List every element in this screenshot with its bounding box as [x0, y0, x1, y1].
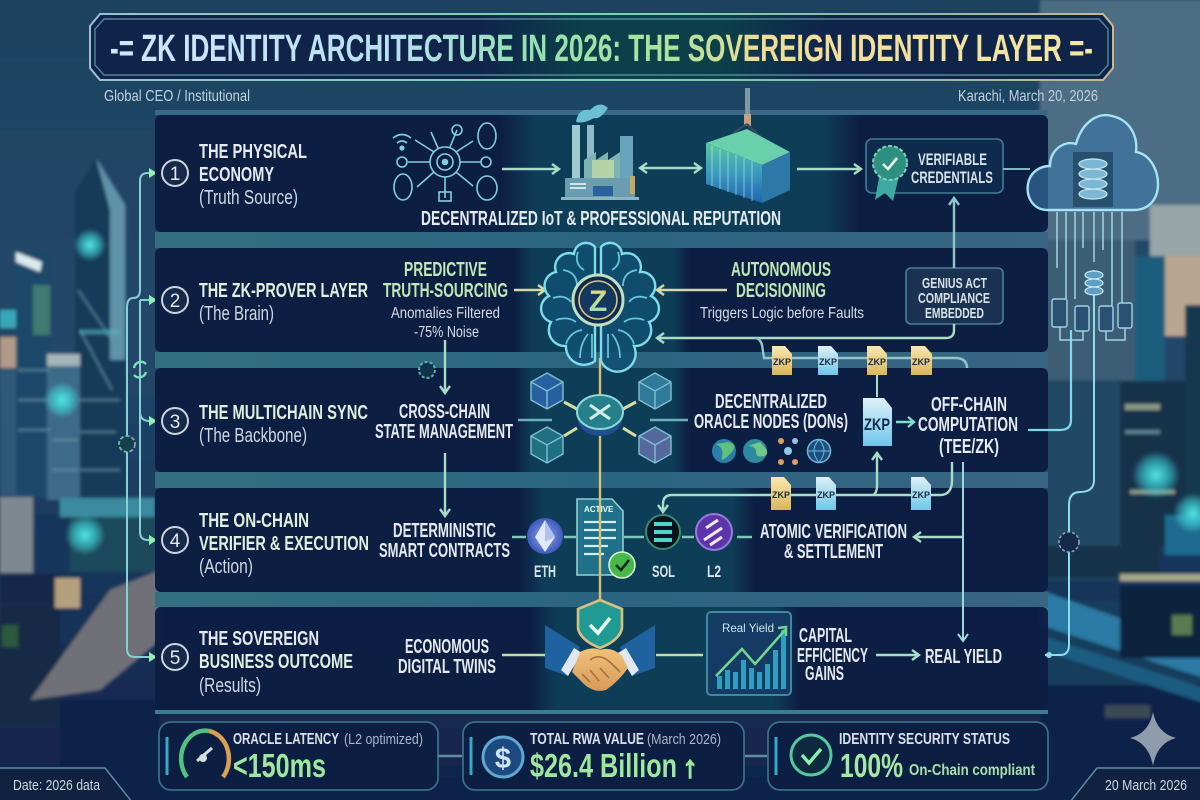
smart contracts text: SMART CONTRACTS	[379, 540, 510, 562]
icon: cloud with databases	[1028, 115, 1158, 340]
KPI: oracle latency	[159, 722, 438, 790]
icon: sparkle star	[1130, 712, 1176, 766]
arrow to off-chain	[896, 417, 914, 427]
icon: L2: L2	[707, 562, 721, 581]
heading: ECONOMY	[199, 164, 274, 186]
step number 4: 4	[170, 531, 181, 552]
vertical brain connector	[599, 358, 601, 600]
corner tab: date: Date: 2026 data	[13, 777, 101, 794]
icon: ZKP document	[863, 398, 892, 446]
capital efficiency text: EFFICIENCY	[797, 645, 868, 667]
heading: THE MULTICHAIN SYNC	[199, 402, 368, 424]
step number 1	[162, 160, 188, 186]
small gear icon	[419, 362, 435, 378]
arrow to brain	[514, 285, 545, 295]
predictive text	[383, 259, 508, 341]
connector lines	[502, 654, 703, 656]
verifiable credentials box: VERIFIABLE	[918, 150, 987, 169]
icon: chain cubes	[531, 373, 671, 463]
KPI: identity security: IDENTITY SECURITY STATUS	[839, 731, 1010, 748]
KPI: oracle latency: <150ms	[233, 747, 326, 784]
predictive text: Anomalies Filtered	[391, 305, 500, 322]
heading: VERIFIER & EXECUTION	[199, 533, 369, 555]
arrow: to off-chain	[755, 338, 972, 386]
KPI: identity security: On-Chain compliant	[909, 762, 1036, 779]
compliance box: GENIUS ACT	[922, 275, 987, 292]
digital twins text: ECONOMOUS	[405, 636, 489, 658]
off-chain text: (TEE/ZK)	[939, 436, 999, 458]
label: IoT: DECENTRALIZED IoT & PROFESSIONAL REPUTATION	[421, 208, 781, 230]
icon: SOL: SOL	[652, 562, 675, 581]
KPI: identity security	[768, 722, 1048, 790]
capital efficiency text	[797, 625, 868, 685]
icons: globes	[712, 438, 831, 465]
ZKP tokens lower row: ZKP	[912, 490, 930, 500]
heading: (Truth Source)	[199, 187, 298, 209]
icon: check	[609, 552, 635, 578]
icon: ETH: ETH	[534, 562, 556, 581]
cross chain text: CROSS-CHAIN	[399, 401, 490, 423]
digital twins text: DIGITAL TWINS	[398, 656, 496, 678]
title banner	[90, 14, 1113, 80]
icon: brain with Z coin: Z	[589, 285, 607, 318]
corner tab: date	[0, 768, 132, 800]
arrow to atomic	[914, 532, 964, 542]
oracle text	[694, 391, 848, 433]
arrow: compliance up to credentials	[949, 198, 959, 268]
ZKP tokens upper row: ZKP	[868, 357, 886, 367]
KPI: oracle latency: (L2 optimized)	[344, 731, 423, 748]
arrow double	[640, 163, 701, 173]
icon: L2	[696, 514, 732, 581]
oracle text: ORACLE NODES (DONs)	[694, 411, 848, 433]
KPI: total RWA: TOTAL RWA VALUE	[530, 731, 644, 748]
smart contracts text: DETERMINISTIC	[393, 520, 496, 542]
icon: active contract document: ACTIVE	[584, 505, 614, 514]
icon: shipping container	[706, 88, 790, 203]
arrow from decisioning	[657, 285, 727, 295]
predictive text: -75% Noise	[414, 324, 479, 341]
subtitle left: Global CEO / Institutional	[104, 88, 250, 105]
KPI: identity security: 100%	[840, 747, 903, 784]
subtitle right: Karachi, March 20, 2026	[958, 88, 1098, 105]
ZKP tokens upper row: ZKP	[912, 357, 930, 367]
heading: (Action)	[199, 556, 253, 578]
off-chain text: OFF-CHAIN	[931, 394, 1007, 416]
real yield label: REAL YIELD	[925, 646, 1002, 668]
cross chain text	[375, 401, 513, 443]
heading: BUSINESS OUTCOME	[199, 651, 353, 673]
KPI: total RWA	[463, 722, 744, 790]
icon: factory	[561, 104, 639, 200]
step number 1: 1	[170, 164, 180, 185]
ZKP tokens upper row	[772, 346, 932, 375]
step number 3	[162, 408, 188, 434]
icon: dollar coin	[483, 737, 523, 777]
predictive text: TRUTH-SOURCING	[383, 280, 508, 302]
heading: THE PHYSICAL	[199, 141, 307, 163]
chart: real yield	[707, 612, 791, 695]
icon: hub	[577, 395, 623, 436]
atomic text: & SETTLEMENT	[784, 541, 883, 563]
link: credentials to cloud	[1003, 168, 1030, 170]
heading: THE SOVEREIGN	[199, 628, 319, 650]
step number 4	[162, 527, 188, 553]
oracle text: DECENTRALIZED	[715, 391, 827, 413]
autonomous text: Triggers Logic before Faults	[700, 305, 864, 322]
off-chain text: COMPUTATION	[918, 414, 1018, 436]
KPI: oracle latency: ORACLE LATENCY	[233, 731, 339, 748]
autonomous text: DECISIONING	[736, 280, 826, 302]
icon: shield and handshake	[545, 600, 655, 691]
capital efficiency text: CAPITAL	[799, 625, 852, 647]
panel: on-chain verifier	[155, 488, 1048, 592]
step number 2: 2	[170, 291, 180, 312]
step number 5: 5	[170, 648, 180, 669]
icon: active contract document	[577, 499, 635, 578]
heading	[199, 628, 353, 697]
verifiable credentials box: CREDENTIALS	[911, 168, 993, 187]
predictive text: PREDICTIVE	[404, 259, 487, 281]
verifiable credentials box	[866, 139, 1003, 201]
smart contracts text	[379, 520, 510, 562]
step number 2	[162, 287, 188, 313]
icon: SOL	[646, 515, 680, 581]
atomic text: ATOMIC VERIFICATION	[760, 521, 907, 543]
connector	[512, 536, 752, 538]
arrow to real yield	[876, 650, 919, 660]
ZKP tokens lower row: ZKP	[772, 490, 790, 500]
ZKP tokens upper row: ZKP	[773, 357, 791, 367]
ZKP tokens lower row: ZKP	[817, 490, 835, 500]
autonomous text	[700, 259, 864, 322]
panel: physical economy	[155, 88, 1048, 232]
link between KPI cards	[438, 755, 768, 757]
panel: ZK prover layer	[155, 248, 1048, 352]
atomic text	[760, 521, 907, 563]
heading: (The Brain)	[199, 303, 274, 325]
icon: badge	[873, 146, 907, 201]
heading: (Results)	[199, 675, 261, 697]
left connector lines	[119, 168, 157, 662]
heading: THE ZK-PROVER LAYER	[199, 280, 368, 302]
heading	[199, 402, 368, 447]
digital twins text	[398, 636, 496, 678]
connector: up to big ZKP	[872, 453, 882, 495]
step number 3: 3	[170, 412, 180, 433]
KPI: total RWA: (March 2026)	[647, 731, 721, 748]
capital efficiency text: GAINS	[805, 663, 844, 685]
connector: small ZKP to big ZKP	[876, 368, 878, 397]
icon: ZKP document: ZKP	[864, 415, 890, 434]
corner tab: release date	[1070, 768, 1200, 800]
bands between panels	[155, 110, 1048, 714]
ZKP tokens upper row: ZKP	[819, 357, 837, 367]
panel: multichain sync	[155, 368, 1048, 472]
arrow	[502, 164, 559, 174]
compliance box: EMBEDDED	[925, 305, 984, 322]
panel: sovereign business outcome	[155, 607, 1048, 710]
right connector lines	[1028, 270, 1094, 658]
KPI: total RWA: $26.4 Billion	[530, 747, 677, 784]
icon: ETH	[527, 518, 563, 581]
chart: real yield: Real Yield	[722, 621, 774, 635]
icon: IoT network	[393, 123, 497, 201]
icon: check circle	[791, 735, 831, 775]
compliance box: COMPLIANCE	[918, 290, 990, 307]
heading: (The Backbone)	[199, 425, 307, 447]
arrow: state management down	[440, 340, 450, 516]
heading: THE ON-CHAIN	[199, 510, 309, 532]
icon: gauge	[181, 731, 229, 777]
icon: dollar coin: $	[495, 743, 511, 775]
heading	[199, 141, 307, 209]
connectors to hub	[518, 419, 688, 421]
autonomous text: AUTONOMOUS	[731, 259, 831, 281]
off-chain text	[918, 394, 1018, 458]
KPI: total RWA: ↑	[682, 751, 698, 784]
compliance box	[906, 268, 1003, 324]
heading	[199, 510, 369, 578]
heading	[199, 280, 368, 325]
ZKP tokens lower row	[771, 477, 931, 510]
step number 5	[162, 644, 188, 670]
icon: brain with Z coin	[541, 243, 659, 372]
arrow: compliance to brain	[657, 324, 954, 343]
arrow	[797, 164, 861, 174]
connector: off-chain back to SOL	[658, 462, 952, 512]
connector: off-chain down to real yield	[958, 462, 968, 641]
cross chain text: STATE MANAGEMENT	[375, 421, 513, 443]
